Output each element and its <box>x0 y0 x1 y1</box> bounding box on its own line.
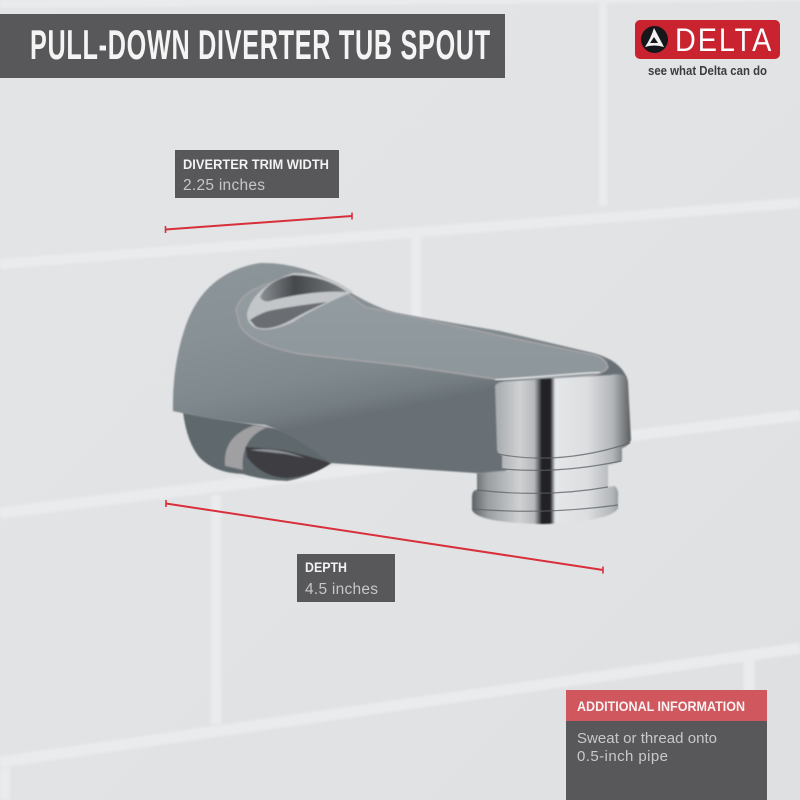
main spout body <box>173 263 627 476</box>
chrome nozzle rings <box>472 374 631 524</box>
callout: diverter trim width <box>175 150 339 198</box>
callout: depth: DEPTH <box>305 560 347 575</box>
Delta logo <box>635 20 780 78</box>
title banner: PULL-DOWN DIVERTER TUB SPOUT <box>30 23 490 69</box>
highlight rim <box>495 372 600 380</box>
chrome diverter pull <box>247 273 353 330</box>
panel: additional information: ADDITIONAL INFORMATION <box>577 699 745 714</box>
dimension line: depth <box>166 500 603 574</box>
Delta logo: see what Delta can do <box>648 63 767 78</box>
Delta logo: DELTA <box>675 23 772 58</box>
lower back plate and drain scoop <box>183 412 340 481</box>
callout: depth: 4.5 inches <box>305 581 378 598</box>
callout: diverter trim width: 2.25 inches <box>183 177 265 194</box>
title banner <box>0 14 505 78</box>
dimension line: diverter trim width <box>166 212 352 233</box>
panel: additional information: 0.5-inch pipe <box>577 748 668 765</box>
top surface of spout <box>236 280 608 379</box>
callout: depth <box>297 554 395 602</box>
callout: diverter trim width: DIVERTER TRIM WIDTH <box>183 157 329 172</box>
panel: additional information <box>566 690 767 800</box>
tub spout <box>173 263 631 524</box>
panel: additional information: Sweat or thread onto <box>577 730 717 747</box>
